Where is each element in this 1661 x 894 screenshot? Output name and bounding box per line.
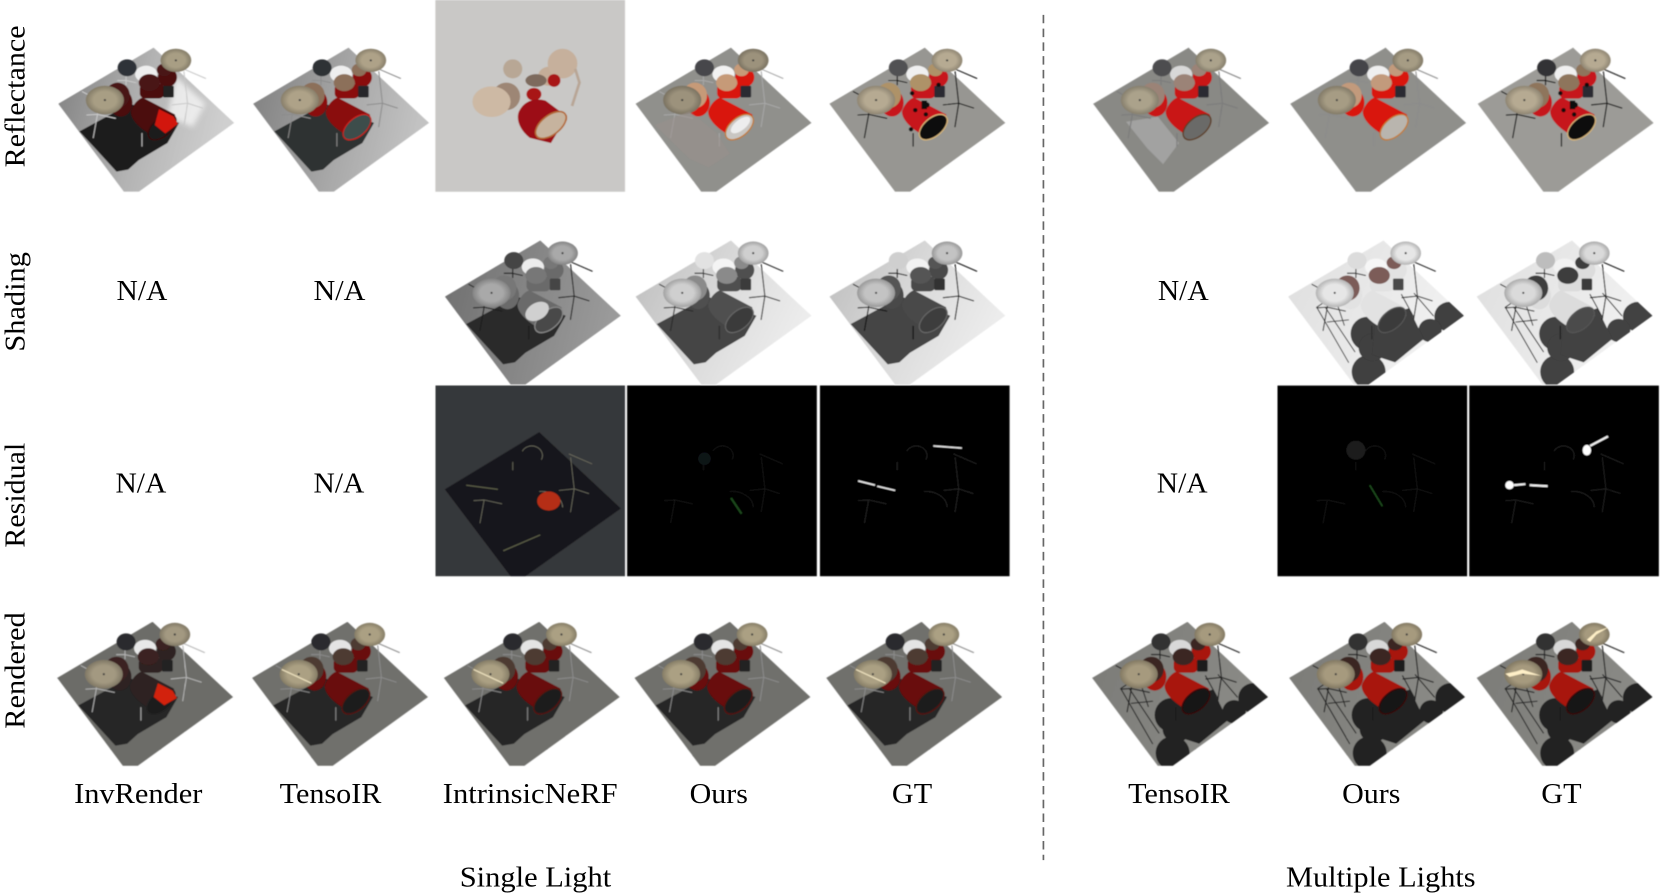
image: GT reflectance multi [1478,48,1654,192]
label: Shading: Shading [0,252,31,352]
label: Reflectance: Reflectance [0,25,31,167]
text: N/A TensoIR multi shading: N/A [1158,276,1209,307]
image: Ours shading [636,240,811,385]
text: N/A TensoIR residual: N/A [314,469,365,500]
image: Ours reflectance [636,48,811,192]
image: GT shading [829,240,1005,385]
label: TensoIR: TensoIR [280,779,382,810]
label: GT multi: GT [1541,779,1582,810]
image: GT shading multi [1477,240,1653,389]
text: N/A TensoIR shading: N/A [314,276,366,307]
image: Ours residual multi [1278,386,1467,576]
image: TensoIR reflectance [253,48,429,192]
image: Intrinsic rendered [444,622,620,766]
text: N/A InvRender residual: N/A [115,469,167,500]
image: GT residual [820,386,1010,576]
image: TensoIR rendered multi [1092,622,1268,770]
panel: multiple lights comparison [1092,48,1659,770]
label: Rendered: Rendered [0,612,31,729]
group heading: Multiple Lights: Multiple Lights [1286,863,1476,894]
image: Ours shading multi [1288,240,1464,389]
image: GT reflectance [829,48,1005,192]
image: GT rendered [826,622,1002,766]
label: TensoIR multi: TensoIR [1128,779,1231,810]
image: GT rendered multi [1477,622,1653,770]
column labels [74,779,1582,810]
text: N/A TensoIR multi residual: N/A [1157,469,1208,500]
label: GT: GT [892,779,932,810]
panel: single light comparison [57,0,1010,766]
image: TensoIR rendered [252,622,428,766]
image: IntrinsicNeRF reflectance [435,0,625,192]
image: Ours residual [627,386,817,576]
dashed divider [1042,15,1044,860]
label: Ours multi: Ours [1342,779,1400,810]
label: IntrinsicNeRF: IntrinsicNeRF [443,779,618,810]
image: GT residual multi [1469,386,1659,576]
image: Ours rendered [635,622,810,766]
image: Ours rendered multi [1289,622,1465,770]
label: Residual: Residual [0,443,31,548]
text: N/A InvRender shading: N/A [117,276,168,307]
image: TensoIR reflectance multi [1093,48,1269,192]
label: InvRender: InvRender [74,779,203,810]
image: Ours reflectance multi [1290,48,1466,192]
row labels [0,25,31,729]
label: Ours: Ours [690,779,748,810]
image: Intrinsic residual [435,386,625,576]
N/A placeholders [115,276,1209,500]
group heading: Single Light: Single Light [460,863,611,894]
image: Intrinsic shading [445,240,621,385]
image: InvRender rendered [57,622,233,766]
image: InvRender reflectance [58,48,234,192]
